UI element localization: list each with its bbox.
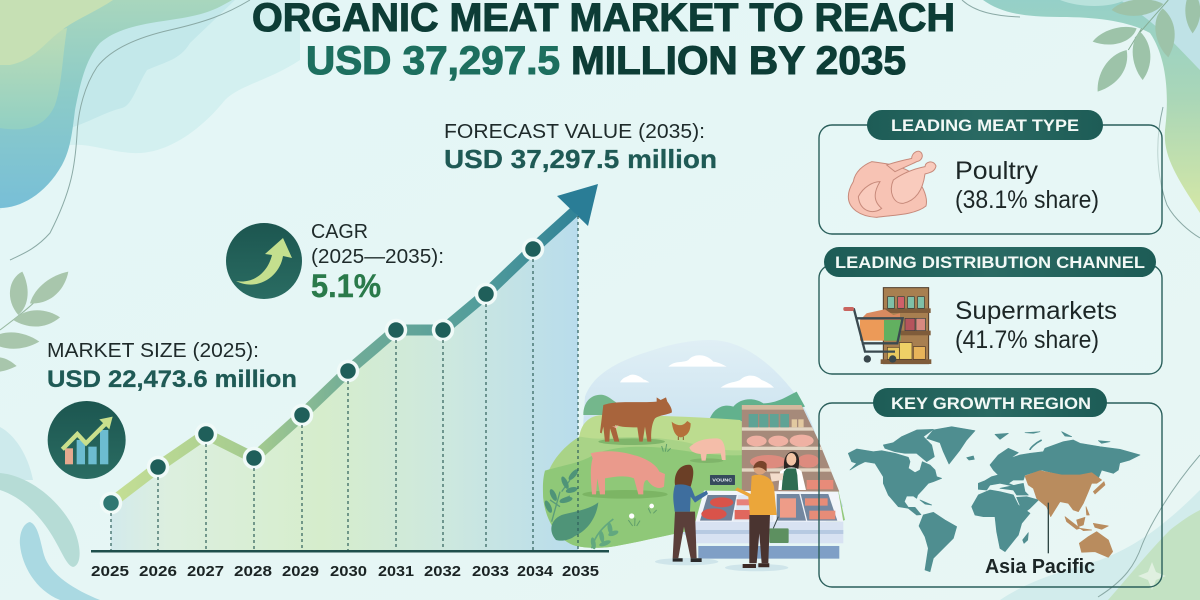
world map bbox=[848, 427, 1140, 572]
chart baseline bbox=[91, 550, 609, 552]
illustration: shopkeeper bbox=[770, 452, 806, 490]
market size callout bbox=[47, 340, 297, 479]
text: poultry share: (38.1% share) bbox=[955, 186, 1099, 214]
chart year labels: 2032 bbox=[424, 563, 461, 580]
forecast value callout: FORECAST VALUE (2035): bbox=[444, 121, 705, 143]
chart year labels: 2031 bbox=[378, 563, 414, 580]
icon: CAGR growth arrow bbox=[226, 223, 302, 299]
chart year labels: 2030 bbox=[330, 563, 367, 580]
illustration: meat display counter: VOUNC bbox=[712, 478, 733, 484]
text: supermarkets share: (41.7% share) bbox=[955, 326, 1099, 354]
illustration: farm and meat counter scene bbox=[543, 340, 845, 571]
text: poultry share bbox=[955, 157, 1099, 214]
decoration: top-right leaves bbox=[1093, 0, 1200, 92]
panel: leading meat type bbox=[819, 110, 1162, 234]
decoration: top-right blobs bbox=[962, 0, 1200, 238]
text: supermarkets share bbox=[955, 297, 1117, 354]
illustration: female shopper bbox=[655, 465, 718, 565]
title: USD 37,297.5 bbox=[306, 39, 560, 83]
illustration: grass tufts bbox=[628, 444, 671, 526]
map: Americas and Greenland bbox=[848, 427, 975, 572]
text: poultry share: Poultry bbox=[955, 157, 1039, 185]
CAGR callout bbox=[226, 221, 444, 304]
chart data points bbox=[102, 240, 542, 512]
chart year labels: 2027 bbox=[187, 563, 224, 580]
title: MILLION BY 2035 bbox=[571, 39, 906, 83]
heading: leading distribution channel: LEADING DISTRIBUTION CHANNEL bbox=[835, 253, 1145, 272]
chart year labels: 2025 bbox=[91, 563, 129, 580]
illustration: male shopper with basket bbox=[725, 461, 789, 571]
decoration: bottom-right waves bbox=[1000, 455, 1200, 600]
chart trend line with arrow bbox=[111, 184, 598, 503]
panel: leading distribution channel bbox=[819, 247, 1162, 374]
chart year labels: 2033 bbox=[472, 563, 509, 580]
decoration: top-left blobs bbox=[0, 0, 300, 260]
map: Asia Pacific highlighted bbox=[1025, 471, 1113, 557]
CAGR callout: 5.1% bbox=[311, 268, 381, 304]
line chart: market growth 2025 to 2035 bbox=[102, 184, 598, 551]
market size callout: MARKET SIZE (2025): bbox=[47, 340, 259, 362]
heading: leading meat type: LEADING MEAT TYPE bbox=[891, 116, 1079, 135]
chart year labels: 2035 bbox=[562, 563, 599, 580]
map label: Asia Pacific: Asia Pacific bbox=[985, 556, 1095, 578]
CAGR callout: (2025—2035): bbox=[311, 246, 444, 268]
illustration: foreground leaves bbox=[543, 468, 619, 550]
chart year labels: 2029 bbox=[282, 563, 319, 580]
title bbox=[252, 0, 955, 83]
illustration: large pig bbox=[582, 451, 668, 499]
icon: raw chicken bbox=[848, 151, 936, 217]
chart dashed drop lines bbox=[111, 216, 578, 550]
panel: key growth region bbox=[819, 388, 1162, 587]
illustration: small pig bbox=[689, 438, 726, 461]
chart year labels: 2034 bbox=[517, 563, 554, 580]
heading: leading distribution channel bbox=[824, 247, 1156, 277]
illustration: meat display counter bbox=[695, 475, 843, 559]
heading: leading meat type bbox=[867, 110, 1103, 140]
chart area fill bbox=[111, 214, 578, 551]
decoration: bottom-left waves bbox=[0, 427, 100, 600]
decoration: left leaves bbox=[0, 272, 68, 372]
illustration: store shelves bbox=[742, 405, 842, 493]
illustration: brown cow bbox=[598, 397, 672, 445]
icon: supermarket shelf and cart bbox=[843, 288, 931, 364]
text: supermarkets share: Supermarkets bbox=[955, 297, 1117, 325]
chart year labels: 2026 bbox=[139, 563, 177, 580]
map: Europe, Africa and northern Asia bbox=[972, 432, 1140, 552]
market size callout: USD 22,473.6 million bbox=[47, 366, 297, 393]
CAGR callout: CAGR bbox=[311, 221, 368, 243]
chart year labels bbox=[91, 563, 599, 580]
forecast value callout: USD 37,297.5 million bbox=[444, 144, 717, 174]
forecast value callout bbox=[444, 121, 717, 174]
illustration: chicken bbox=[672, 421, 723, 463]
icon: market bar chart bbox=[48, 401, 126, 479]
heading: key growth region: KEY GROWTH REGION bbox=[891, 394, 1091, 413]
heading: key growth region bbox=[873, 388, 1107, 417]
chart year labels: 2028 bbox=[234, 563, 272, 580]
